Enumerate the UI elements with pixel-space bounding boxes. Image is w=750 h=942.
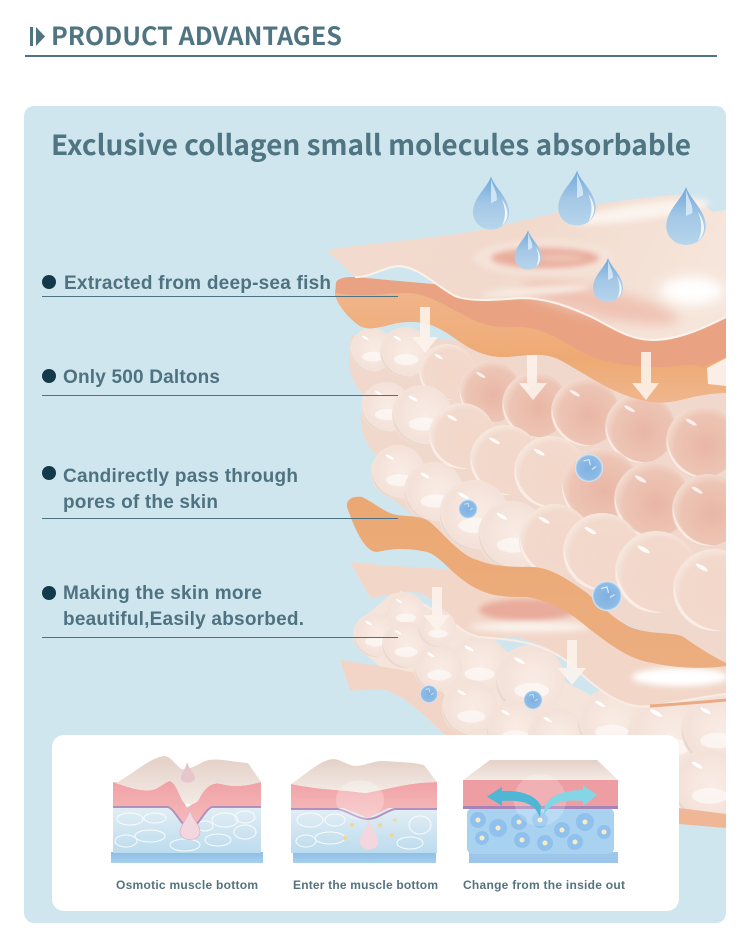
top skin sheet	[326, 194, 726, 340]
point 1: extracted from deep-sea fish	[42, 273, 398, 297]
caption: enter the muscle bottom: Enter the muscle bottom	[293, 878, 438, 892]
illustration: layered skin	[326, 170, 750, 828]
lower orange band	[347, 497, 726, 668]
middle skin sheet	[350, 562, 728, 707]
point 4: more beautiful, easily absorbed: beautiful,Easily absorbed.	[63, 609, 304, 630]
caption: change from the inside out: Change from the inside out	[463, 878, 625, 892]
caption: osmotic muscle bottom: Osmotic muscle bottom	[116, 878, 258, 892]
small left bubbles	[353, 592, 462, 692]
upper bubble layer	[350, 327, 750, 631]
diagram: enter the muscle bottom	[291, 759, 437, 863]
skin base fill: lower	[366, 592, 726, 735]
title: Exclusive collagen small molecules absorbable	[51, 124, 691, 164]
skin base fill: upper	[349, 335, 726, 665]
section header	[30, 17, 342, 53]
point 3: pass through pores: Candirectly pass through	[63, 466, 298, 487]
icon: right teal arrow	[543, 785, 597, 818]
water drops	[473, 170, 706, 302]
diagram: osmotic muscle bottom	[111, 756, 263, 863]
point 1: extracted from deep-sea fish: Extracted from deep-sea fish	[64, 273, 331, 294]
diagram: change from the inside out	[463, 760, 618, 863]
band end highlight	[707, 358, 726, 386]
icon: bar and triangle	[30, 27, 45, 46]
orange under layer	[335, 277, 726, 402]
serum balls	[420, 454, 622, 710]
point 4: more beautiful, easily absorbed	[42, 583, 398, 638]
point 4: more beautiful, easily absorbed: Making the skin more	[63, 583, 262, 604]
icon: left teal arrow	[487, 787, 541, 818]
upper orange band	[335, 293, 726, 402]
panel: absorption steps card	[52, 735, 679, 911]
point 3: pass through pores: pores of the skin	[63, 492, 218, 513]
lower small sheet	[340, 660, 462, 735]
point 2: only 500 daltons	[42, 367, 398, 396]
lower big bubbles	[442, 638, 726, 813]
point 2: only 500 daltons: Only 500 Daltons	[63, 367, 220, 388]
point 3: pass through pores	[42, 466, 398, 519]
upper arrows	[412, 307, 659, 400]
heading: product advantages: PRODUCT ADVANTAGES	[51, 17, 342, 53]
header rule	[25, 55, 717, 57]
bottom orange strip	[679, 808, 726, 828]
lower arrows	[423, 587, 586, 685]
